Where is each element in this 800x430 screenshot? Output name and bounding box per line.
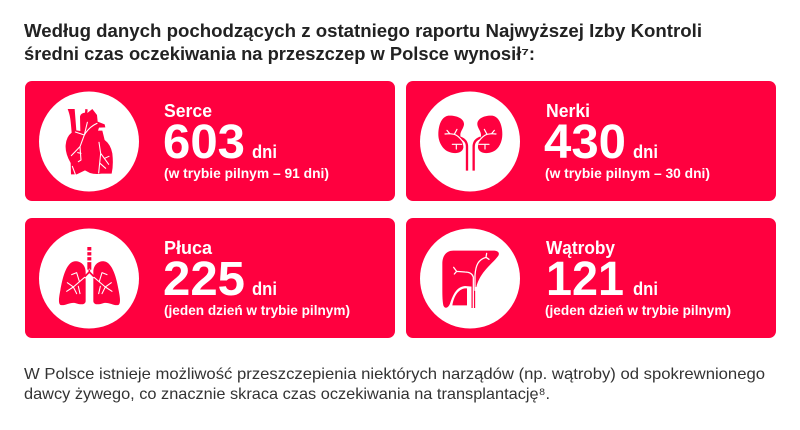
icon: kidneys: [420, 92, 520, 192]
panel: heart: [25, 81, 395, 201]
value: 603 days: 603: [163, 116, 245, 169]
title: Według danych pochodzących z ostatniego raportu Najwyższej Izby Kontroli: [24, 21, 702, 41]
label: liver name: Wątroby: [546, 238, 615, 258]
footer text: W Polsce istnieje możliwość przeszczepienia niektórych narządów (np. wątroby) od spokrewnionego: [24, 366, 765, 383]
footer text: dawcy żywego, co znacznie skraca czas oczekiwania na transplantację⁸.: [24, 386, 550, 403]
value: 225 days: 225: [163, 253, 245, 306]
title: średni czas oczekiwania na przeszczep w Polsce wynosił⁷:: [24, 44, 535, 64]
icon: lungs: [39, 228, 139, 328]
value: 430 days: 430: [544, 116, 626, 169]
unit: days: dni: [633, 279, 658, 299]
footer text: [24, 366, 765, 403]
note: urgent mode: (w trybie pilnym – 30 dni): [545, 165, 710, 181]
unit: days: dni: [252, 279, 277, 299]
unit: days: dni: [252, 142, 277, 162]
value: 121 days: 121: [546, 253, 624, 306]
label: lungs name: Płuca: [164, 238, 213, 258]
label: heart name: Serce: [164, 101, 212, 121]
unit: days: dni: [633, 142, 658, 162]
icon: heart: [39, 92, 139, 192]
icon: liver: [420, 228, 520, 328]
note: urgent mode: (w trybie pilnym – 91 dni): [164, 165, 329, 181]
panel: lungs: [25, 218, 395, 338]
label: kidneys name: Nerki: [546, 101, 590, 121]
panel: kidneys: [406, 81, 776, 201]
title: [24, 21, 702, 64]
panel: liver: [406, 218, 776, 338]
note: urgent mode: (jeden dzień w trybie pilnym): [545, 302, 731, 318]
note: urgent mode: (jeden dzień w trybie pilnym): [164, 302, 350, 318]
